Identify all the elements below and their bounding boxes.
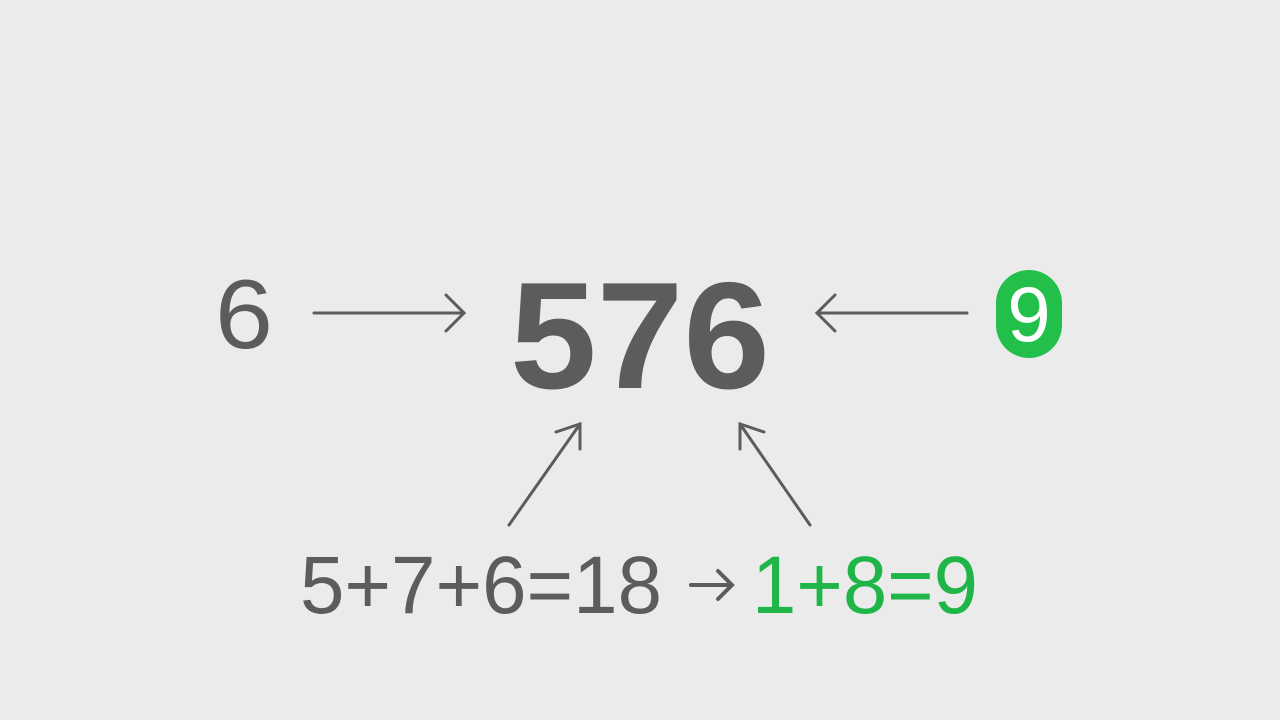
equation: digit sum: [300, 540, 978, 631]
badge: green 9: [996, 270, 1062, 358]
arrow: right to center: [817, 295, 967, 331]
badge: green 9: 9: [1007, 270, 1051, 358]
gray sum: 5+7+6=18: [300, 540, 662, 631]
arrow: bottom-left diagonal: [509, 424, 580, 525]
main number 576: 576: [510, 251, 770, 421]
arrow: left to center: [314, 295, 464, 331]
left number 6: 6: [215, 259, 273, 369]
green reduction: 1+8=9: [752, 540, 978, 631]
small arrow: [691, 571, 732, 599]
arrow: bottom-right diagonal: [740, 424, 810, 525]
